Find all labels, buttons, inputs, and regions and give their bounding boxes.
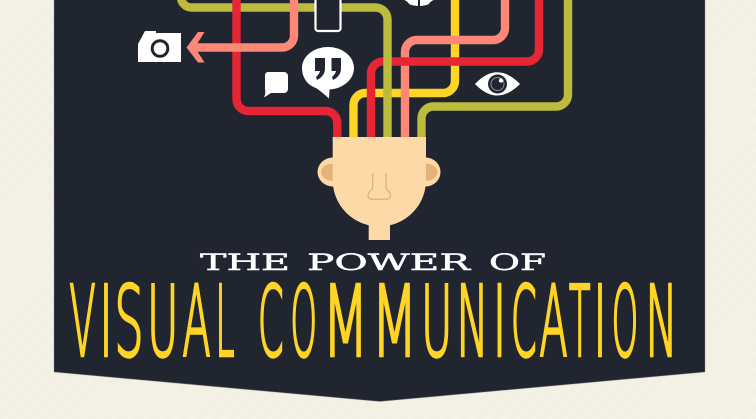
arrow head pointing to camera [186,32,204,62]
cable: salmon leading to camera arrow [195,0,294,48]
cable: red from top left to head [236,0,337,140]
heading: visual communication: O [290,265,317,378]
heading: visual communication: A [182,265,210,378]
heading: visual communication: I [593,265,607,378]
face and neck [333,137,426,240]
heading: visual communication: M [372,265,418,378]
heading: visual communication: V [70,265,96,378]
heading: visual communication: U [421,265,452,378]
icon: eye [475,72,520,96]
text: N [646,265,678,378]
nose [368,173,390,200]
heading: visual communication: M [322,265,368,378]
right ear [410,158,440,186]
icon: small speech bubble [264,72,288,98]
heading: visual communication: U [147,265,178,378]
cable: olive from top left to head [181,0,388,140]
cable: olive from top right to head [422,0,568,140]
icon: camera [138,31,181,62]
cables: coloured lines running into the head [181,0,568,140]
heading: visual communication: L [216,265,234,378]
heading: the power of: POWER [307,251,473,276]
icon: quotation speech bubble [302,47,354,98]
icon: globe [392,0,446,7]
heading: the power of: THE [200,251,290,276]
heading: the power of: OF [489,251,546,276]
heading: visual communication: T [569,265,590,378]
cable: red from top right to head [371,0,539,140]
cable: salmon from top to head [405,0,505,140]
heading: visual communication: C [511,265,536,378]
heading: visual communication: C [258,265,284,378]
heading: visual communication: S [114,265,144,378]
heading: visual communication: N [456,265,488,378]
heading: visual communication: O [612,265,638,378]
icon: phone [316,0,340,31]
illustration: head [318,137,440,240]
heading: visual communication: A [540,265,568,378]
left ear [318,158,348,186]
heading: visual communication: I [99,265,113,378]
heading: visual communication: I [493,265,506,378]
cable: yellow from top to head [354,0,455,140]
